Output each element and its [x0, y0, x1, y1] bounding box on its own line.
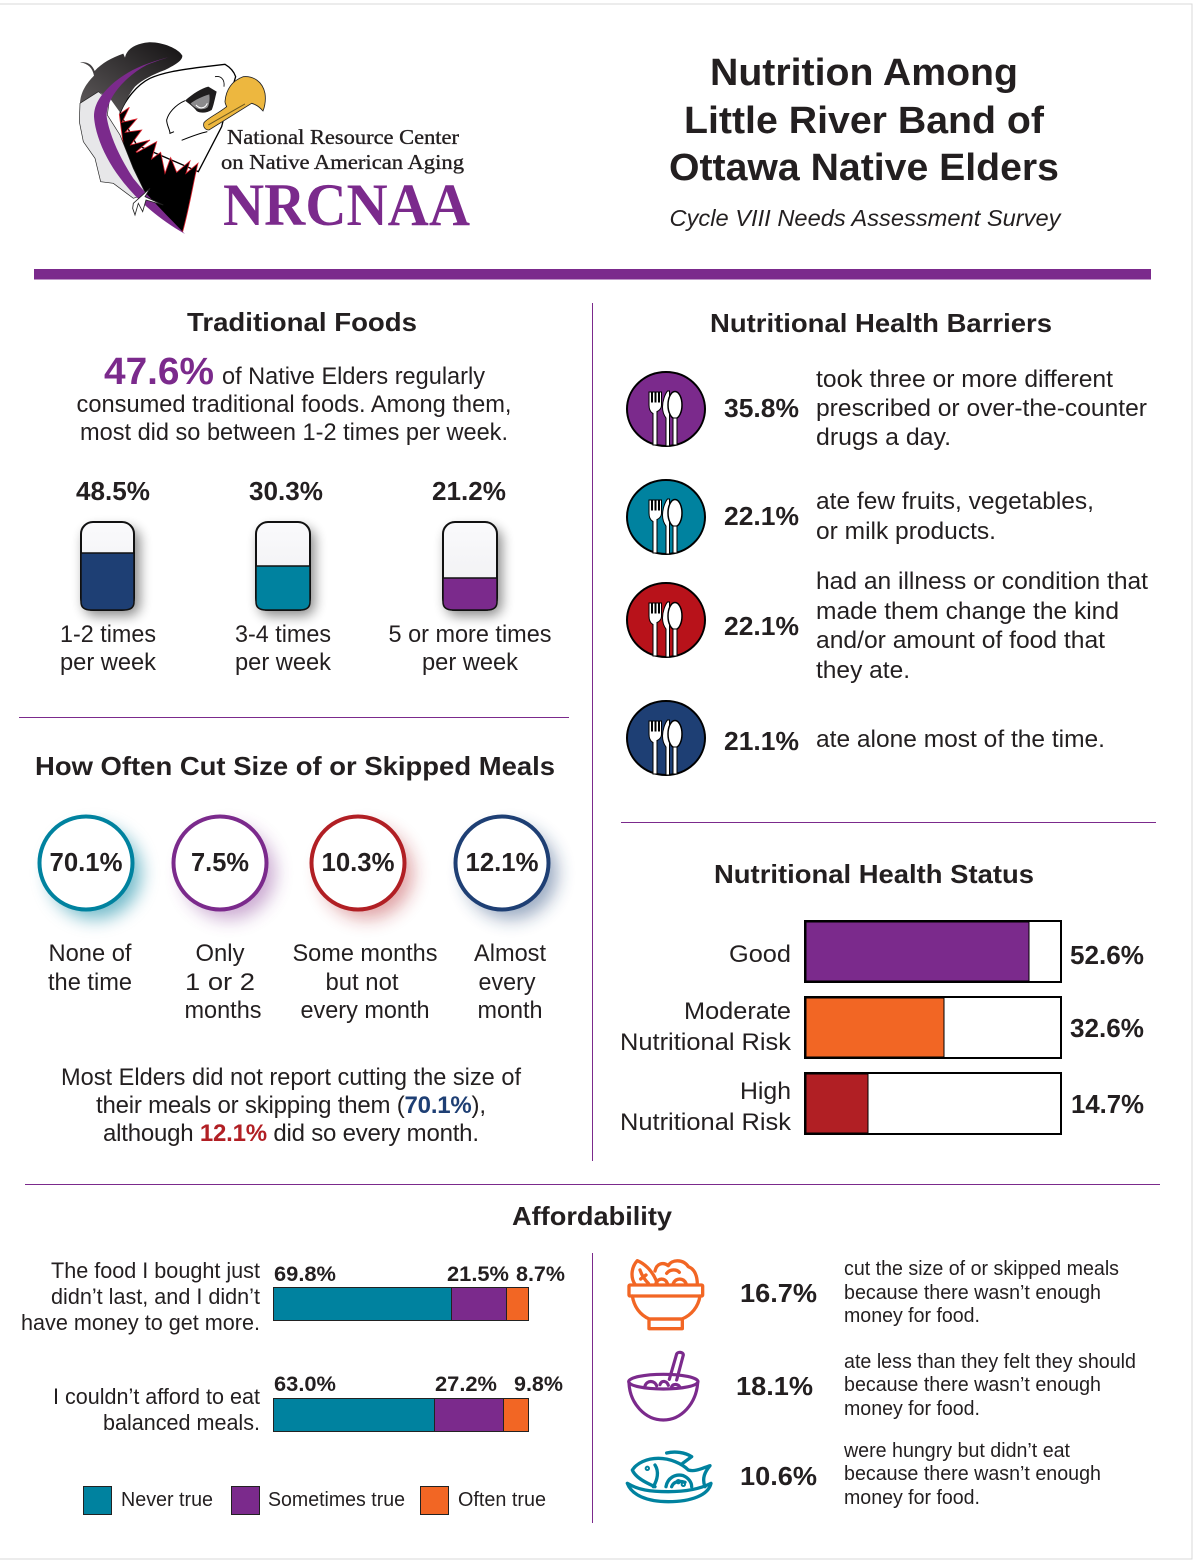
barrier: illness or condition: made them change the kind	[816, 598, 1119, 625]
panel: affordability	[21, 1201, 1136, 1514]
circle: only 1 or 2 months: Only	[196, 940, 244, 967]
logo wordmark: NRCNAA	[223, 172, 470, 238]
icon: salad bowl	[629, 1261, 703, 1329]
stacked bar: food didn't last: 69.8%	[274, 1262, 336, 1286]
traditional foods summary text: consumed traditional foods. Among them,	[76, 391, 512, 418]
status bar: moderate nutritional risk: 32.6%	[1070, 1013, 1144, 1043]
jar: 1-2 times per week: 48.5%	[76, 476, 150, 506]
circle: none of the time: the time	[48, 969, 132, 996]
circle: some months but not every month	[292, 816, 438, 1024]
circle: almost every month: 12.1%	[466, 847, 538, 877]
status bar: moderate nutritional risk	[620, 997, 1144, 1058]
affordability item: ate less: 18.1%	[736, 1371, 813, 1401]
affordability item: hungry but didn't eat: were hungry but didn’t eat	[843, 1440, 1070, 1462]
icon: soup bowl with spoon	[629, 1352, 698, 1420]
logo: NRCNAA eagle and feather	[79, 42, 470, 238]
title: Nutrition Among	[710, 52, 1018, 94]
status bar: moderate nutritional risk: Moderate	[684, 998, 791, 1025]
icon: eagle head and feather	[79, 42, 265, 234]
heading: traditional foods: Traditional Foods	[187, 307, 417, 337]
barrier: illness or condition: they ate.	[816, 657, 910, 684]
stacked bar: couldn't afford balanced meals: 63.0%	[274, 1372, 336, 1396]
stacked bar: food didn't last	[21, 1258, 565, 1335]
barrier: prescribed drugs: drugs a day.	[816, 424, 951, 451]
barrier: prescribed drugs: took three or more different	[816, 366, 1113, 393]
skipped meals summary text: Most Elders did not report cutting the size of	[61, 1064, 521, 1091]
status bar: good	[729, 921, 1144, 982]
barrier: ate alone: 21.1%	[724, 726, 799, 756]
affordability item: hungry but didn't eat	[627, 1440, 1101, 1509]
circle: almost every month: every	[478, 969, 536, 996]
icon: cutlery red	[627, 583, 705, 657]
circle: almost every month	[456, 816, 557, 1024]
jar: 1-2 times per week: per week	[60, 649, 157, 676]
icon: fish on plate	[627, 1452, 711, 1502]
barrier: illness or condition: had an illness or condition that	[816, 568, 1148, 595]
jar: 5 or more times per week	[388, 476, 552, 676]
circle: some months but not every month: Some months	[292, 940, 438, 967]
stacked bar: couldn't afford balanced meals: balanced meals.	[103, 1410, 260, 1435]
icon: cutlery navy	[627, 701, 705, 775]
traditional foods summary text: 47.6%	[104, 351, 214, 393]
circle: none of the time: None of	[48, 940, 132, 967]
panel: nutritional health barriers	[627, 308, 1148, 775]
stacked bar: food didn't last: didn’t last, and I didn’t	[51, 1284, 260, 1309]
skipped meals summary text: although 12.1% did so every month.	[103, 1120, 479, 1147]
barrier: illness or condition: and/or amount of food that	[816, 627, 1105, 654]
traditional foods summary text: most did so between 1-2 times per week.	[80, 419, 508, 446]
heading: affordability: Affordability	[512, 1201, 673, 1231]
circle: none of the time	[40, 816, 141, 996]
heading: cut size or skipped meals: How Often Cut Size of or Skipped Meals	[35, 751, 555, 781]
affordability item: hungry but didn't eat: because there wasn’t enough	[844, 1463, 1101, 1485]
circle: none of the time: 70.1%	[50, 847, 122, 877]
stacked bar: couldn't afford balanced meals: 9.8%	[514, 1372, 563, 1396]
title: Ottawa Native Elders	[669, 147, 1059, 189]
affordability item: cut or skipped meals: cut the size of or skipped meals	[844, 1258, 1119, 1280]
circle: only 1 or 2 months	[174, 816, 275, 1024]
legend: Often true	[458, 1489, 546, 1511]
skipped meals summary text: their meals or skipping them (70.1%),	[96, 1092, 486, 1119]
circle: almost every month: Almost	[474, 940, 546, 967]
jar: 3-4 times per week: 30.3%	[249, 476, 323, 506]
panel: how often cut size or skipped meals	[35, 751, 557, 1147]
jar: 1-2 times per week	[60, 476, 157, 676]
jar: 5 or more times per week: per week	[422, 649, 519, 676]
affordability item: ate less: ate less than they felt they should	[844, 1351, 1136, 1373]
stacked bar: food didn't last: 21.5%	[447, 1262, 509, 1286]
status bar: high nutritional risk	[620, 1073, 1144, 1136]
panel: traditional foods	[60, 307, 552, 676]
barrier: illness or condition: 22.1%	[724, 611, 799, 641]
affordability item: cut or skipped meals: 16.7%	[740, 1278, 817, 1308]
affordability item: ate less: money for food.	[844, 1398, 980, 1420]
barrier: few fruits and vegetables: 22.1%	[724, 501, 799, 531]
status bar: good: 52.6%	[1070, 940, 1144, 970]
affordability item: cut or skipped meals	[629, 1258, 1119, 1329]
subtitle: Cycle VIII Needs Assessment Survey	[670, 205, 1062, 231]
circle: almost every month: month	[478, 997, 542, 1024]
title: Little River Band of	[684, 100, 1044, 142]
heading: nutritional health barriers: Nutritional Health Barriers	[710, 308, 1052, 338]
jar: 1-2 times per week: 1-2 times	[60, 621, 156, 648]
icon: cutlery purple	[627, 372, 705, 446]
circle: some months but not every month: 10.3%	[322, 847, 394, 877]
traditional foods summary text	[76, 351, 512, 446]
barrier: ate alone: ate alone most of the time.	[816, 726, 1105, 753]
icon: cutlery teal	[627, 480, 705, 554]
affordability item: cut or skipped meals: money for food.	[844, 1305, 980, 1327]
title	[669, 52, 1059, 189]
status bar: high nutritional risk: 14.7%	[1071, 1089, 1144, 1119]
barrier: illness or condition	[627, 568, 1148, 684]
barrier: prescribed drugs: prescribed or over-the-counter	[816, 395, 1147, 422]
barrier: few fruits and vegetables	[627, 480, 1094, 554]
logo wordmark	[221, 125, 470, 238]
traditional foods summary text: of Native Elders regularly	[222, 363, 485, 390]
stacked bar: food didn't last: have money to get more.	[21, 1310, 260, 1335]
jar: 3-4 times per week: per week	[235, 649, 332, 676]
barrier: ate alone	[627, 701, 1105, 775]
status bar: high nutritional risk: High	[740, 1078, 791, 1105]
stacked bar: food didn't last: The food I bought just	[51, 1258, 260, 1283]
logo wordmark: on Native American Aging	[221, 150, 465, 174]
circle: only 1 or 2 months: 1 or 2	[185, 969, 255, 996]
heading: nutritional health status: Nutritional Health Status	[714, 859, 1034, 889]
affordability item: hungry but didn't eat: 10.6%	[740, 1461, 817, 1491]
barrier: few fruits and vegetables: ate few fruits, vegetables,	[816, 488, 1094, 515]
status bar: high nutritional risk: Nutritional Risk	[620, 1109, 792, 1136]
affordability item: ate less	[629, 1351, 1136, 1420]
circle: only 1 or 2 months: months	[184, 997, 262, 1024]
affordability item: hungry but didn't eat: money for food.	[844, 1487, 980, 1509]
legend: Sometimes true	[268, 1489, 405, 1511]
legend: Never true	[121, 1489, 213, 1511]
circle: some months but not every month: every month	[300, 997, 430, 1024]
stacked bar: couldn't afford balanced meals: I couldn’t afford to eat	[53, 1384, 260, 1409]
stacked bar: food didn't last: 8.7%	[516, 1262, 565, 1286]
circle: some months but not every month: but not	[326, 969, 399, 996]
jar: 3-4 times per week	[235, 476, 332, 676]
circle: only 1 or 2 months: 7.5%	[191, 847, 249, 877]
logo wordmark: National Resource Center	[227, 125, 459, 149]
skipped meals summary text	[61, 1064, 521, 1147]
status bar: moderate nutritional risk: Nutritional Risk	[620, 1029, 792, 1056]
jar: 5 or more times per week: 21.2%	[432, 476, 506, 506]
jar: 5 or more times per week: 5 or more times	[388, 621, 552, 648]
status bar: good: Good	[729, 941, 791, 968]
barrier: prescribed drugs: 35.8%	[724, 393, 799, 423]
stacked bar: couldn't afford balanced meals: 27.2%	[435, 1372, 497, 1396]
barrier: prescribed drugs	[627, 366, 1147, 451]
barrier: few fruits and vegetables: or milk products.	[816, 518, 996, 545]
affordability item: ate less: because there wasn’t enough	[844, 1374, 1101, 1396]
header rule	[34, 269, 1151, 280]
jar: 3-4 times per week: 3-4 times	[235, 621, 331, 648]
panel: nutritional health status	[620, 859, 1144, 1136]
legend	[84, 1486, 546, 1514]
affordability item: cut or skipped meals: because there wasn’t enough	[844, 1282, 1101, 1304]
stacked bar: couldn't afford balanced meals	[53, 1372, 563, 1435]
